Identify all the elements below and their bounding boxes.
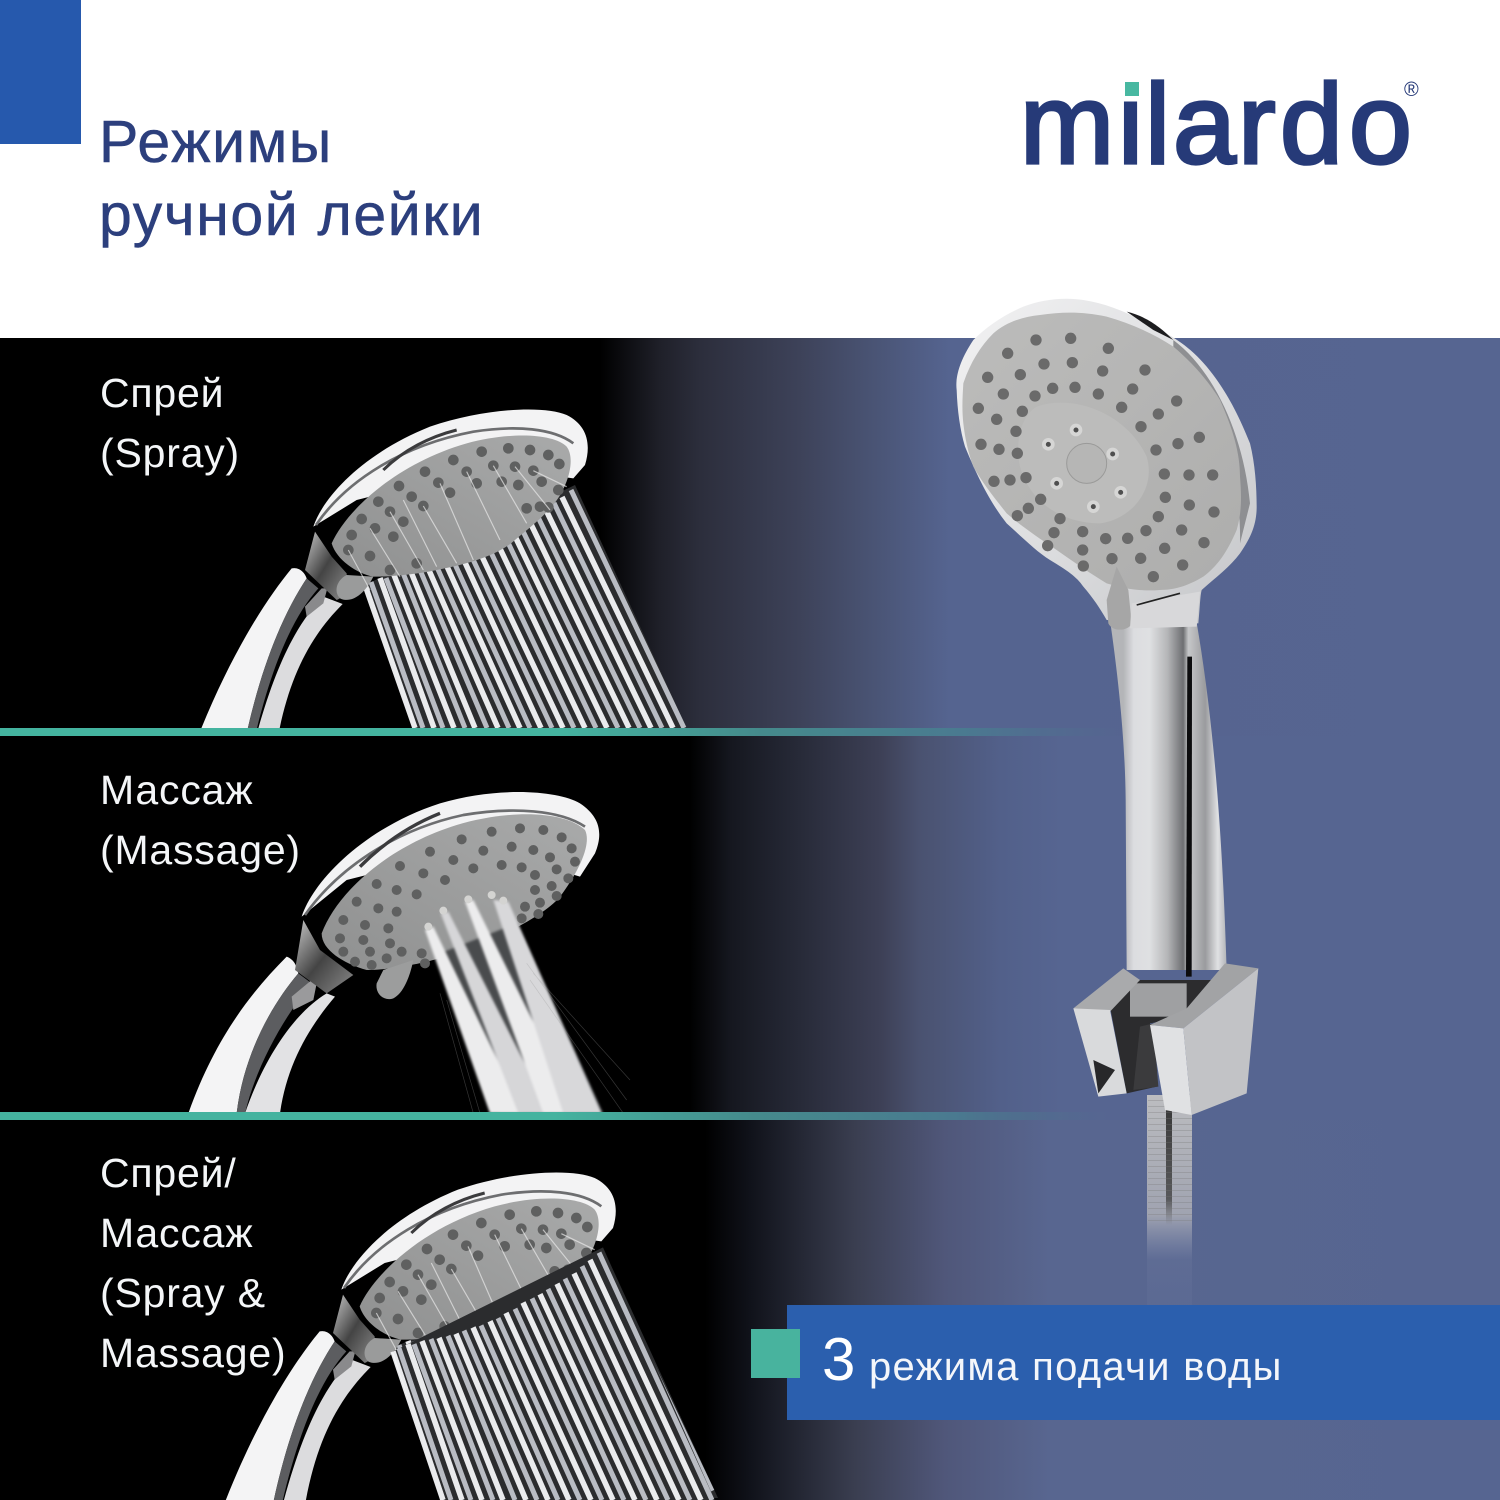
center circle	[1067, 443, 1107, 483]
label: spray: (Spray)	[100, 430, 240, 476]
neck	[305, 532, 347, 600]
central zone	[1018, 403, 1149, 523]
neck	[295, 920, 353, 993]
chrome rim	[302, 792, 599, 917]
logo: milardo: ®	[1404, 79, 1419, 101]
handle	[188, 957, 335, 1113]
wall bracket	[1073, 963, 1258, 1115]
spray plate	[322, 814, 587, 970]
callout: 3 water modes: режима подачи воды	[869, 1345, 1283, 1389]
shower head: spray and massage mode	[215, 1172, 718, 1500]
divider: teal line two	[0, 1112, 1110, 1120]
shower head: massage mode	[188, 792, 630, 1113]
spray plate	[332, 436, 571, 577]
shower head: spray mode	[202, 410, 686, 728]
massage water jets	[425, 900, 630, 1113]
panel: spray row background	[0, 338, 1500, 736]
title: ручной лейки	[99, 182, 484, 248]
callout: 3 water modes: 3	[822, 1326, 855, 1393]
divider: teal line one	[0, 728, 1120, 736]
background: white header	[0, 0, 1500, 338]
label: spray	[100, 370, 240, 476]
title: Режимы	[99, 109, 333, 175]
trigger	[1107, 567, 1132, 630]
trigger	[376, 960, 413, 999]
head	[956, 299, 1257, 630]
nozzles	[348, 448, 559, 570]
title	[99, 109, 484, 248]
main hand shower	[956, 299, 1257, 977]
label: massage: (Massage)	[100, 827, 301, 873]
handle	[1110, 607, 1227, 977]
label: massage: Массаж	[100, 767, 253, 813]
label: spray and massage: Спрей/	[100, 1150, 237, 1196]
handle	[187, 568, 343, 767]
label: spray: Спрей	[100, 370, 224, 416]
hose	[1147, 1095, 1192, 1345]
massage nozzles	[1048, 430, 1121, 507]
label: massage	[100, 767, 301, 873]
nozzles	[340, 828, 575, 965]
trigger	[337, 575, 373, 600]
label: spray and massage	[100, 1150, 286, 1376]
callout: 3 water modes	[751, 1305, 1500, 1420]
jet nozzles	[428, 895, 503, 927]
nozzles	[978, 338, 1214, 577]
panel: spray and massage row background	[0, 1120, 1500, 1500]
label: spray and massage: Massage)	[100, 1330, 286, 1376]
panel: massage row background	[0, 736, 1500, 1120]
logo: milardo: milardo	[1020, 61, 1412, 187]
label: spray and massage: (Spray &	[100, 1270, 266, 1316]
chrome rim	[313, 409, 588, 527]
blue corner square	[0, 0, 81, 144]
label: spray and massage: Массаж	[100, 1210, 253, 1256]
handle collar	[1130, 592, 1200, 628]
spray plate	[962, 313, 1241, 590]
water over plate	[348, 466, 567, 590]
chrome rim	[956, 299, 1257, 623]
